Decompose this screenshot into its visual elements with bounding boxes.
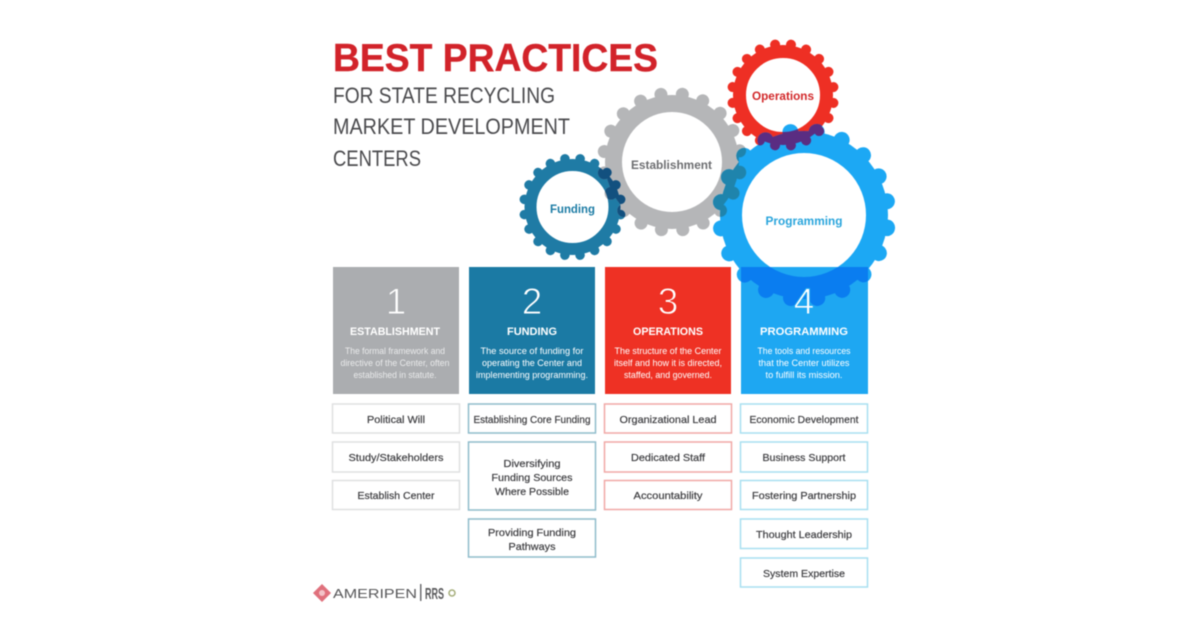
panel: 3 operations: staffed, and governed. [624,370,712,381]
panel: 2 funding: The source of funding for [480,346,584,357]
panel: 4 programming: that the Center utilizes [758,358,850,369]
panel: 2 funding [469,267,595,394]
panel: 1 establishment: directive of the Center, often [340,358,450,369]
list: funding items: Providing Funding [488,527,576,539]
title: BEST PRACTICES [333,37,658,80]
gear label: operations: Operations [752,91,814,103]
subtitle [333,83,570,171]
panel: 3 operations [605,267,731,394]
panel: 1 establishment: The formal framework and [345,346,445,357]
gear overlap: programming and establishment [712,148,747,218]
list: funding items [468,404,596,557]
icon: rrs circle [449,590,455,596]
logos [313,584,455,603]
panel: 3 operations: OPERATIONS [633,326,703,338]
gear: establishment [594,84,750,240]
list: programming items [740,404,868,587]
list: establishment items: Study/Stakeholders [348,452,444,464]
list: operations items: Organizational Lead [620,414,717,426]
list: programming items: Fostering Partnership [752,490,856,502]
panel: 1 establishment [333,267,459,394]
gear label: establishment: Establishment [631,160,712,172]
list: funding items: Establishing Core Funding [474,414,591,426]
rrs wordmark: RRS [425,586,444,603]
panel: 4 programming [740,266,869,395]
panel: 3 operations: The structure of the Center [614,346,722,357]
gear cluster [518,38,896,282]
gear: funding [517,151,628,263]
list: funding items: Pathways [508,541,556,553]
panel: 3 operations: 3 [658,281,678,322]
list: establishment items: Political Will [367,414,425,426]
gear overlap: programming and operations [756,123,825,151]
panel: 2 funding: 2 [522,281,542,322]
panel: 2 funding: FUNDING [507,326,557,338]
list: programming items: Thought Leadership [756,529,852,541]
list: establishment items: Establish Center [358,490,435,502]
list: operations items: Dedicated Staff [631,452,705,464]
list: funding items: Where Possible [495,486,569,498]
panel: 1 establishment: established in statute. [354,370,436,381]
subtitle: CENTERS [333,146,421,171]
subtitle: MARKET DEVELOPMENT [333,114,570,139]
gear label: programming: Programming [766,216,842,228]
panel: 4 programming: to fulfill its mission. [766,370,842,381]
list: programming items: Business Support [762,452,846,464]
list: establishment items [332,404,460,510]
panel: 1 establishment: ESTABLISHMENT [350,326,440,338]
logo divider [420,584,422,601]
icon: ameripen diamond [313,584,331,602]
list: funding items: Diversifying [504,458,561,470]
gear overlap: establishment and funding [597,167,626,218]
gear: operations [725,37,841,153]
ameripen wordmark: AMERIPEN [333,586,417,601]
list: operations items: Accountability [634,490,703,502]
gear label: funding: Funding [550,204,595,216]
panel: 4 programming: PROGRAMMING [760,326,848,338]
panel: 3 operations: itself and how it is directed, [614,358,722,369]
panel: 2 funding: operating the Center and [482,358,582,369]
gear: programming [708,119,900,311]
subtitle: FOR STATE RECYCLING [333,83,555,108]
panel: 4 programming: The tools and resources [758,346,851,357]
list: programming items: System Expertise [763,568,845,580]
list: funding items: Funding Sources [492,472,572,484]
panel: 1 establishment: 1 [386,281,406,322]
panel: 2 funding: implementing programming. [476,370,588,381]
list: operations items [604,404,732,510]
list: programming items: Economic Development [750,414,859,426]
panel: 4 programming: 4 [794,281,814,322]
